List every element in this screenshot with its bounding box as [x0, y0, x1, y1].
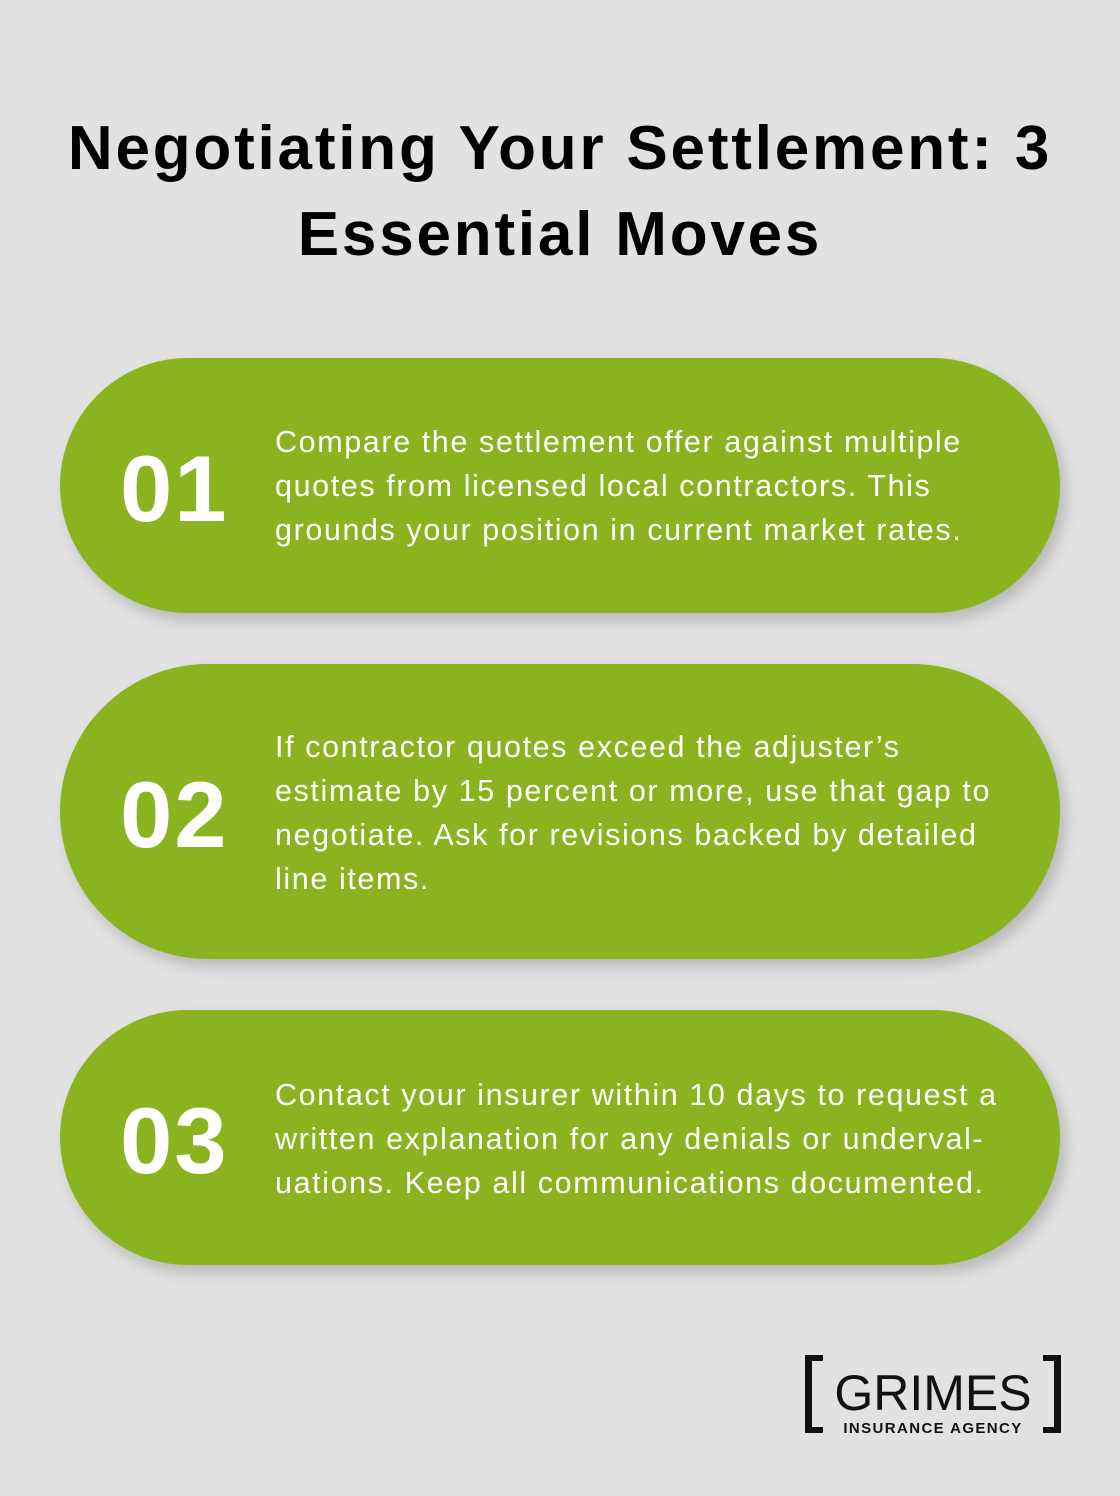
text step 02: If contractor quotes exceed the adjuster’s — [275, 730, 901, 764]
title: Negotiating Your Settlement: 3 — [68, 114, 1052, 183]
panel: step 02 — [60, 664, 1060, 959]
text step 02: negotiate. Ask for revisions backed by detailed — [275, 818, 978, 852]
logo — [805, 1355, 1061, 1437]
text step 01: Compare the settlement offer against multiple — [275, 425, 962, 459]
text step 02 — [275, 730, 991, 896]
number 03: 03 — [120, 1088, 229, 1193]
text step 03: uations. Keep all communications documented. — [275, 1166, 985, 1200]
text step 03: written explanation for any denials or underval- — [275, 1122, 984, 1156]
panel: step 03 — [60, 1010, 1060, 1265]
text step 01: grounds your position in current market rates. — [275, 513, 962, 547]
number 02: 02 — [120, 762, 229, 867]
logo: GRIMES — [834, 1365, 1032, 1421]
panel: step 01 — [60, 358, 1060, 613]
logo: INSURANCE AGENCY — [843, 1420, 1023, 1437]
number 01: 01 — [120, 436, 229, 541]
title: Essential Moves — [298, 200, 822, 269]
text step 02: estimate by 15 percent or more, use that gap to — [275, 774, 991, 808]
text step 01 — [275, 425, 962, 547]
title — [68, 114, 1052, 269]
text step 01: quotes from licensed local contractors. This — [275, 469, 931, 503]
text step 03: Contact your insurer within 10 days to request a — [275, 1078, 998, 1112]
text step 02: line items. — [275, 862, 430, 896]
text step 03 — [275, 1078, 998, 1200]
